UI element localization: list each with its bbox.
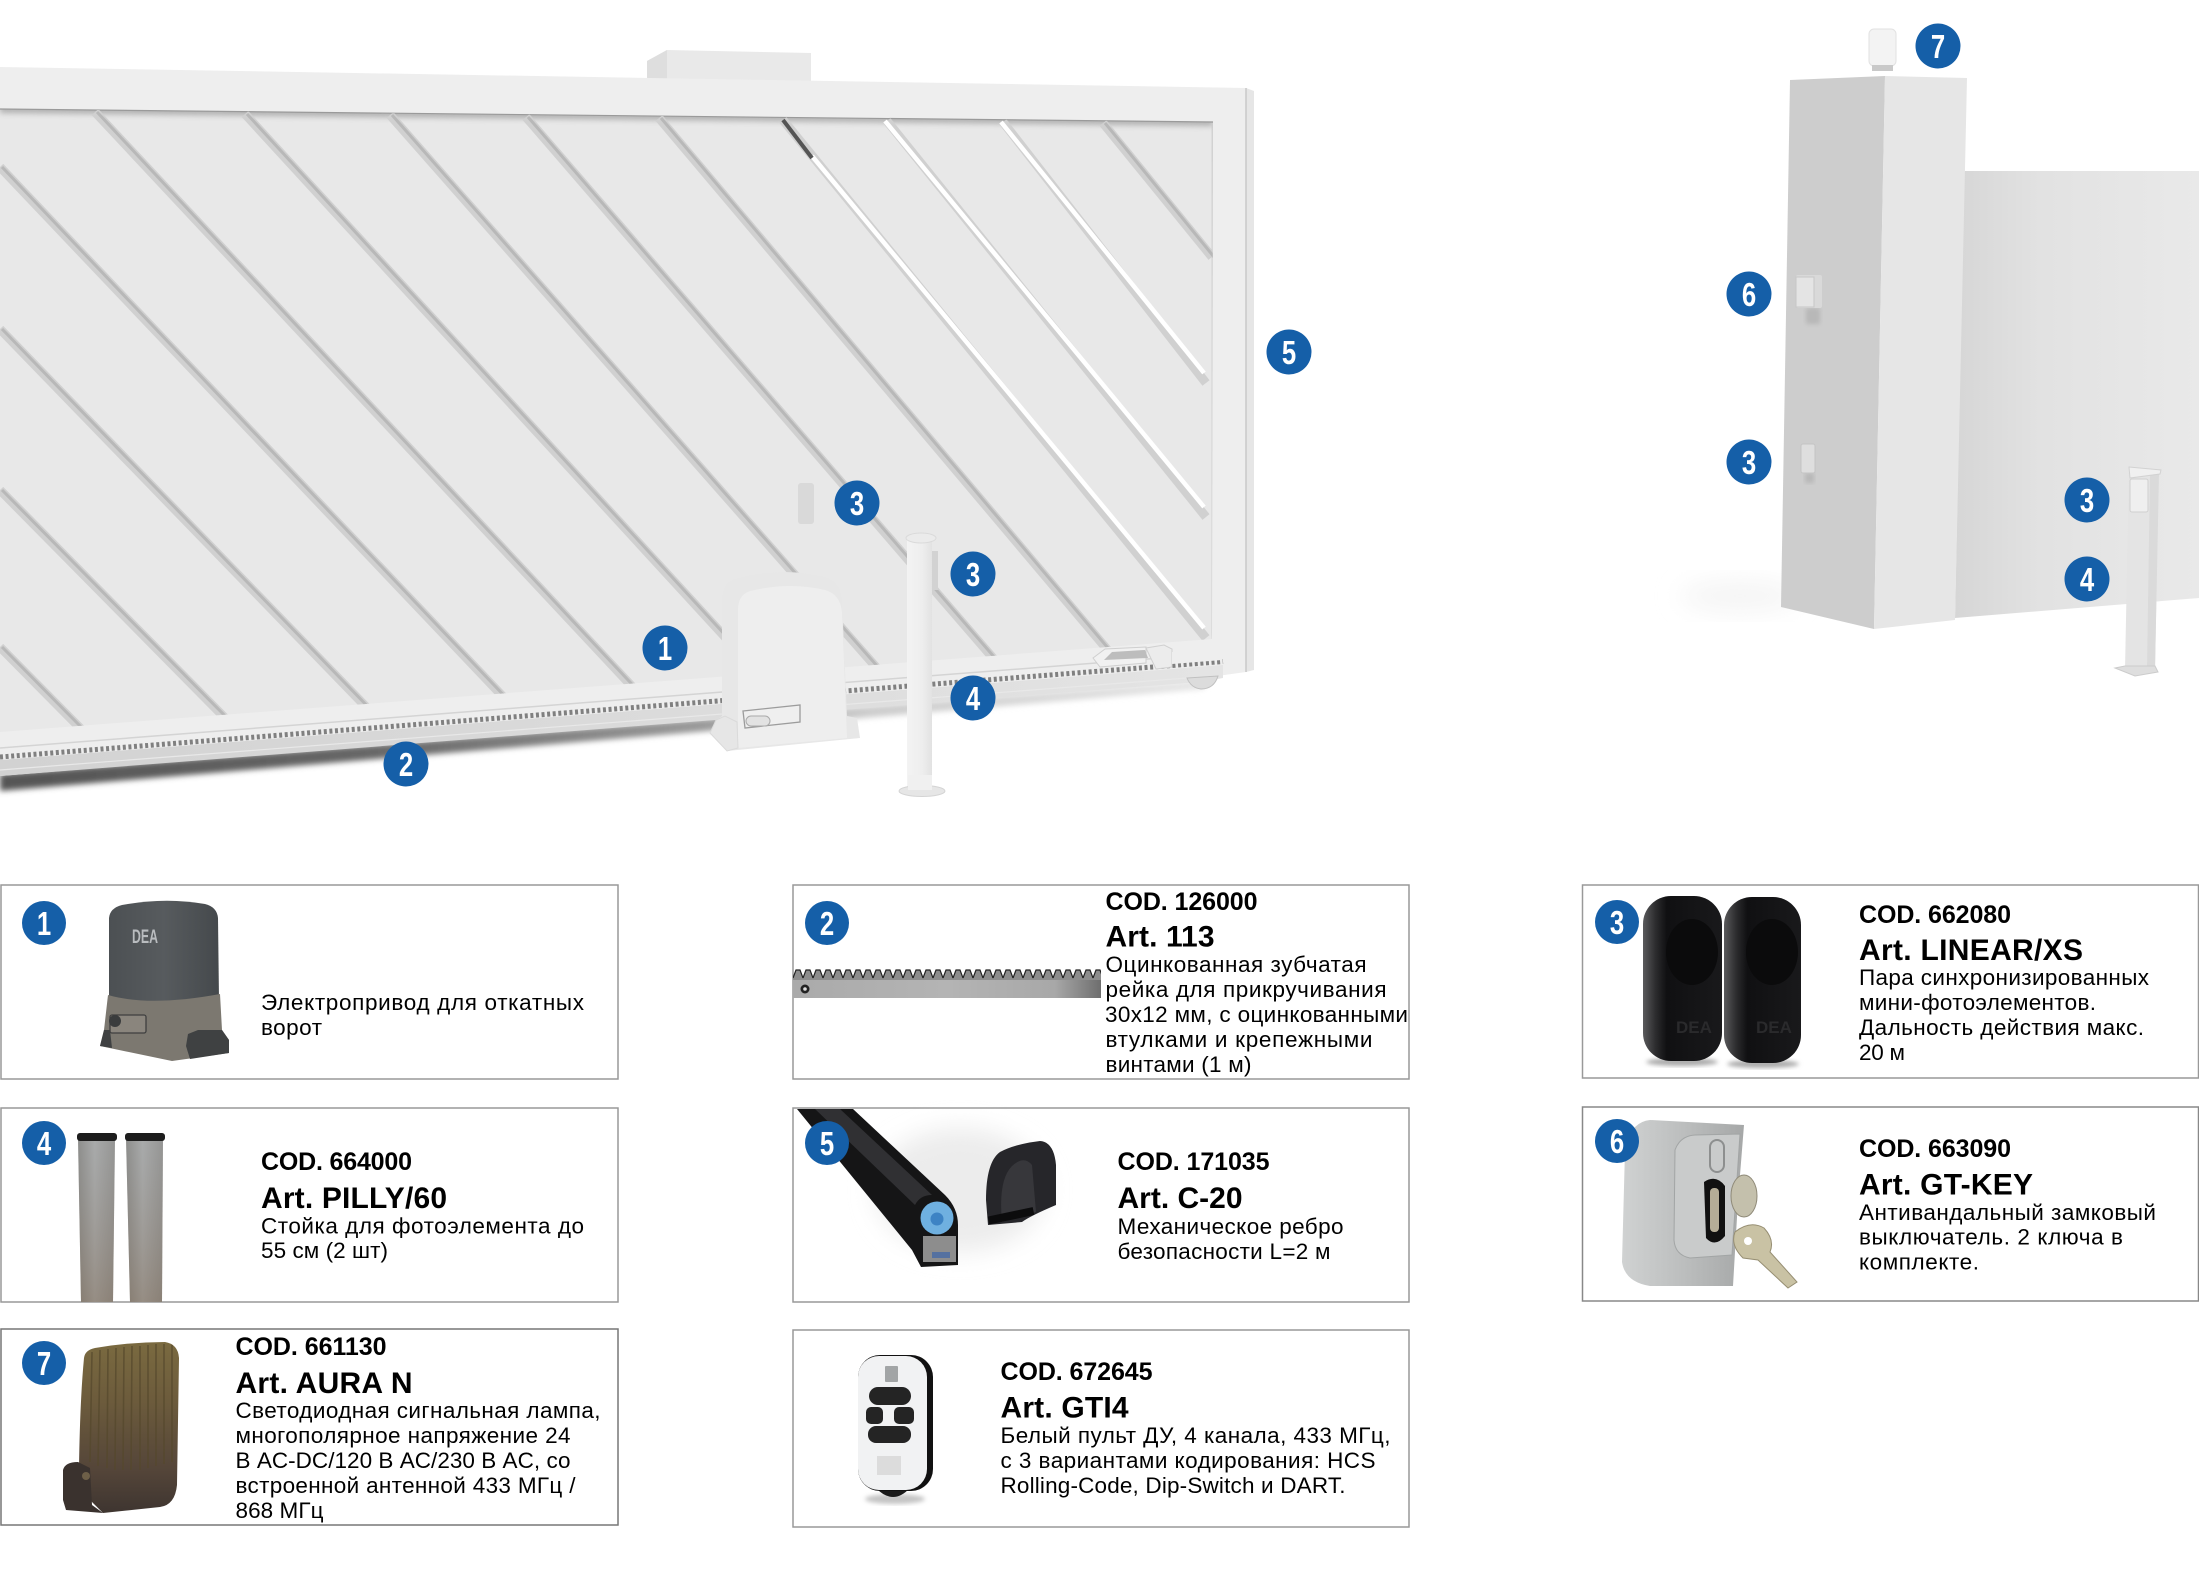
panel: item 5 safety edge	[793, 1108, 1409, 1302]
product text: COD. 664000	[261, 1148, 412, 1176]
floor shadow near pillar	[1680, 580, 1800, 612]
product text: Дальность действия макс.	[1859, 1015, 2144, 1040]
limit slider bracket	[1093, 645, 1222, 669]
badge 4	[22, 1121, 66, 1165]
description: ворот	[261, 1015, 322, 1040]
product text: Rolling-Code, Dip-Switch и DART.	[1000, 1473, 1346, 1498]
right illustration: pillar and wall	[1680, 29, 2199, 676]
panel: item 4 post	[1, 1108, 618, 1302]
photocell post at wall	[2115, 467, 2161, 676]
badge 3 on gate	[834, 480, 880, 526]
panel: item 1 motor	[1, 885, 618, 1079]
badge 4 by post: 4	[966, 681, 981, 718]
product text: COD. 672645	[1000, 1358, 1153, 1386]
badge 4 by wall post: 4	[2080, 562, 2095, 599]
product text: Оцинкованная зубчатая	[1106, 952, 1366, 977]
gate panel with diagonal slats	[0, 109, 1214, 735]
product text: комплекте.	[1859, 1250, 1979, 1274]
product text: Антивандальный замковый	[1859, 1200, 2156, 1225]
product text: 20 м	[1859, 1040, 1905, 1065]
panel: item 7 lamp	[1, 1329, 618, 1525]
product text: Art. GT-KEY	[1859, 1168, 2033, 1202]
product text: Art. 113	[1106, 920, 1214, 954]
product text: Пара синхронизированных	[1859, 965, 2150, 990]
badge 3: 3	[1610, 905, 1624, 942]
small photocell on gate	[798, 483, 814, 524]
pillar left face	[1781, 76, 1885, 629]
badge 7 by lamp	[1916, 24, 1960, 68]
product text: Art. LINEAR/XS	[1859, 934, 2083, 967]
dark gap start	[783, 120, 812, 158]
product text: рейка для прикручивания	[1106, 977, 1386, 1002]
icon: pair of photocells: DEA	[1756, 1018, 1792, 1037]
product text	[261, 1148, 584, 1263]
ground shadow below gate	[0, 680, 1205, 791]
badge 1 on gate: 1	[658, 631, 672, 668]
badge 4 by wall post	[2064, 556, 2110, 602]
badge 5: 5	[820, 1126, 834, 1163]
icon: motor drive: DEA	[132, 927, 158, 948]
product text: Art. GTI4	[1000, 1392, 1129, 1424]
product text: 868 МГц	[236, 1498, 324, 1523]
product text	[1118, 1148, 1344, 1264]
gate wheel	[1187, 676, 1218, 689]
badge 2	[805, 901, 849, 945]
badge 3 by pillar: 3	[1742, 445, 1756, 482]
badge 3 on gate: 3	[850, 486, 864, 523]
badge 7	[22, 1341, 66, 1385]
motor drive (white)	[710, 572, 860, 751]
product text: мини-фотоэлементов.	[1859, 990, 2096, 1015]
product text	[1000, 1358, 1390, 1498]
description: Электропривод для откатных	[261, 990, 585, 1015]
product text	[236, 1333, 600, 1523]
gate frame	[0, 67, 1246, 776]
gate right edge strip	[1246, 88, 1254, 672]
badge 6 by key switch	[1726, 272, 1772, 316]
bottom rail highlight	[0, 654, 1212, 748]
product text: Белый пульт ДУ, 4 канала, 433 МГц,	[1000, 1423, 1390, 1448]
badge 1 on gate	[642, 626, 688, 670]
photocell post (front)	[899, 533, 945, 796]
product text: Светодиодная сигнальная лампа,	[236, 1398, 600, 1423]
badge 3 by wall post	[2064, 478, 2110, 522]
product text: Art. PILLY/60	[261, 1182, 447, 1215]
product text: COD. 663090	[1859, 1135, 2011, 1163]
panel: item 2 rack	[793, 885, 1409, 1079]
pillar right face	[1874, 76, 1967, 629]
signal lamp on pillar	[1869, 29, 1896, 71]
top box on gate	[647, 50, 811, 81]
product text	[1859, 1135, 2156, 1274]
icon: safety edge profile and cap	[797, 1109, 1056, 1267]
badge 2 on gate: 2	[399, 747, 413, 784]
product text	[1105, 888, 1408, 1077]
product text: COD. 171035	[1118, 1148, 1270, 1176]
icon: signal lamp	[63, 1342, 179, 1513]
badge 3 by post: 3	[966, 557, 980, 594]
badge 5 by gate edge	[1266, 330, 1312, 374]
product text: многополярное напряжение 24	[236, 1423, 570, 1448]
photocell on pillar	[1801, 444, 1815, 483]
badge 5	[805, 1121, 849, 1165]
icon: two aluminium posts	[77, 1133, 165, 1302]
wall	[1955, 171, 2199, 618]
panel: remote control	[793, 1330, 1409, 1527]
product text: 55 см (2 шт)	[261, 1238, 388, 1263]
icon: remote control	[858, 1355, 933, 1504]
badge 1	[22, 901, 66, 945]
icon: key switch with keys	[1622, 1120, 1797, 1288]
product text: Art. C-20	[1118, 1182, 1242, 1215]
badge 3	[1595, 900, 1639, 944]
white gaps between slats	[812, 121, 1204, 628]
badge 4: 4	[37, 1126, 52, 1163]
product text: COD. 662080	[1859, 901, 2011, 929]
product text: Стойка для фотоэлемента до	[261, 1214, 584, 1238]
badge 3 by wall post: 3	[2080, 483, 2094, 520]
toothed rack on gate	[0, 662, 1223, 776]
key switch on pillar	[1796, 275, 1822, 324]
badge 2: 2	[820, 906, 834, 943]
badge 1: 1	[37, 906, 51, 943]
product text: выключатель. 2 ключа в	[1859, 1224, 2123, 1250]
product text: COD. 661130	[236, 1333, 386, 1361]
badge 6 by key switch: 6	[1742, 277, 1756, 314]
product text: встроенной антенной 433 МГц /	[236, 1473, 576, 1498]
badge 7: 7	[37, 1346, 51, 1383]
product text: Art. AURA N	[236, 1367, 412, 1400]
badge 7 by lamp: 7	[1931, 29, 1945, 66]
product text: Механическое ребро	[1118, 1214, 1344, 1239]
icon: pair of photocells: DEA	[1676, 1018, 1712, 1037]
badge 3 by pillar	[1726, 440, 1772, 484]
product text: винтами (1 м)	[1106, 1052, 1252, 1077]
badge 3 by post	[950, 552, 996, 596]
product text: COD. 126000	[1106, 888, 1258, 916]
product text: В AC-DC/120 В AC/230 В AC, со	[236, 1448, 570, 1473]
icon: motor drive	[100, 901, 229, 1061]
description	[261, 990, 585, 1040]
product text: 30x12 мм, с оцинкованными	[1105, 1002, 1408, 1027]
product text: втулками и крепежными	[1106, 1027, 1372, 1052]
badge 6	[1595, 1119, 1639, 1163]
rear photocell behind post	[932, 551, 938, 590]
badge 6: 6	[1610, 1124, 1624, 1161]
icon: pair of photocells	[1643, 896, 1801, 1068]
gate illustration: sliding gate with accessories	[0, 50, 1254, 796]
panel: item 6 key switch	[1582, 1107, 2198, 1301]
badge 5 by gate edge: 5	[1282, 335, 1296, 372]
panel: item 3 photocells	[1582, 885, 2198, 1078]
product text	[1859, 901, 2150, 1065]
product text: безопасности L=2 м	[1118, 1239, 1330, 1264]
product text: с 3 вариантами кодирования: HCS	[1000, 1448, 1376, 1473]
icon: toothed rack	[793, 968, 1101, 998]
badge 2 on gate	[384, 742, 428, 786]
badge 4 by post	[950, 676, 996, 720]
